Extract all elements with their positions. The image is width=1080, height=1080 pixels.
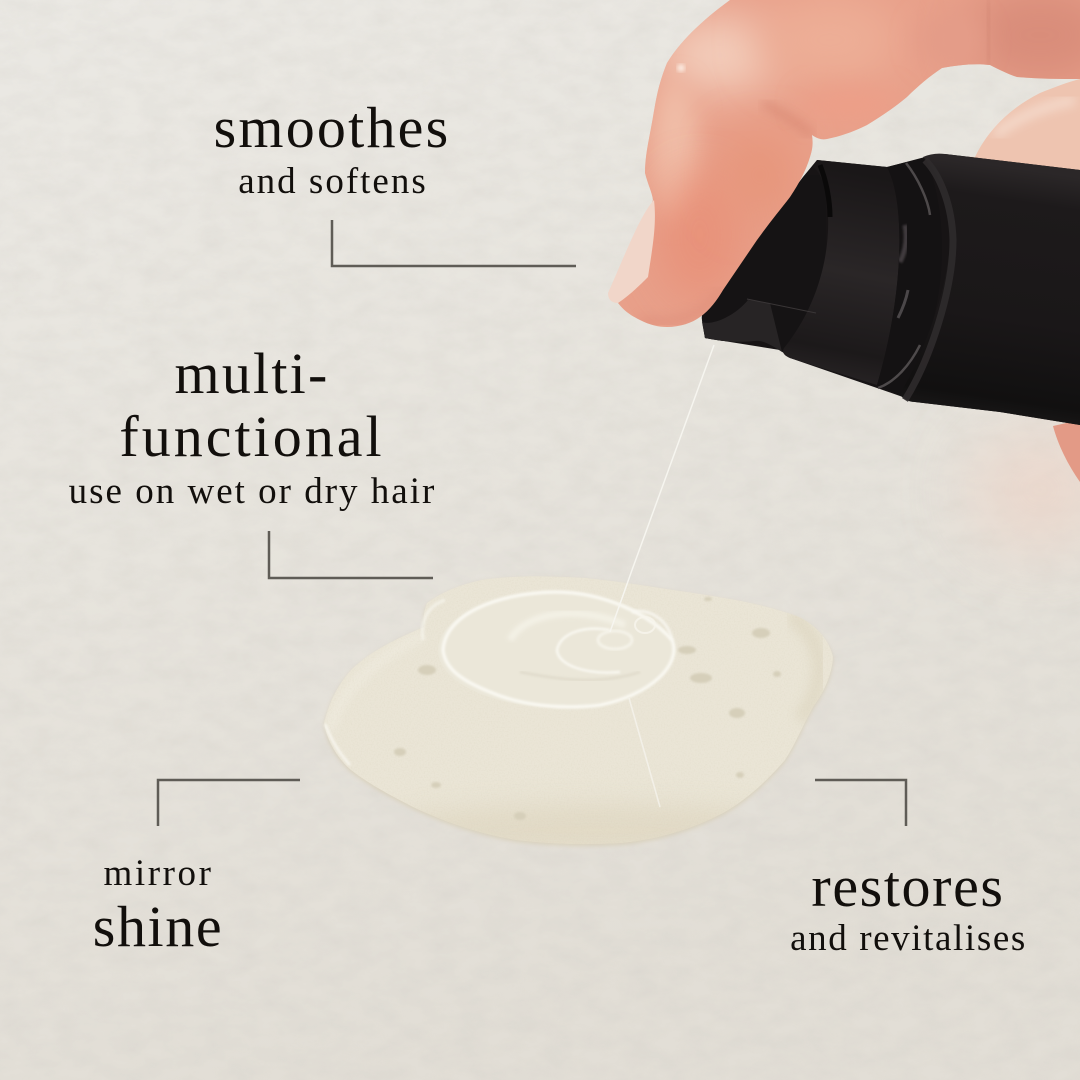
text: smoothes and softens: and softens	[238, 161, 428, 202]
callout line: mirror shine	[158, 780, 300, 826]
text: smoothes and softens: smoothes	[214, 95, 450, 160]
lower finger tip	[1053, 420, 1080, 482]
pump head	[702, 175, 826, 358]
droplets	[394, 597, 781, 820]
main finger	[608, 0, 1080, 327]
callout line: multi-functional	[269, 531, 433, 578]
text: multi-functional: functional	[119, 404, 385, 469]
ring highlights	[905, 160, 953, 400]
text: mirror shine: shine	[93, 894, 223, 959]
bottle silhouette	[702, 154, 1080, 425]
oil pool	[324, 576, 834, 847]
text: multi-functional: multi-	[175, 341, 329, 406]
text: mirror shine: mirror	[103, 853, 214, 894]
fingernail	[608, 200, 655, 303]
callout line: restores	[815, 780, 906, 826]
pool left edge glint	[325, 724, 350, 765]
back finger	[940, 79, 1080, 175]
text: multi-functional: use on wet or dry hair	[69, 471, 436, 512]
text: mirror shine	[93, 853, 223, 959]
oil stream	[610, 345, 714, 807]
text: smoothes and softens	[214, 95, 450, 202]
callout line: smoothes	[332, 220, 576, 266]
cap	[783, 160, 899, 385]
text: multi-functional	[69, 341, 436, 512]
body	[900, 154, 1080, 425]
pump collar shade	[702, 300, 782, 352]
warm glow near hand	[970, 430, 1080, 550]
central swirl	[422, 592, 674, 707]
bottle	[702, 154, 1080, 425]
text: restores and revitalises	[790, 854, 1027, 959]
text: restores and revitalises: restores	[811, 854, 1005, 919]
text: restores and revitalises: and revitalises	[790, 918, 1027, 959]
bottle shoulder ring	[877, 158, 942, 395]
